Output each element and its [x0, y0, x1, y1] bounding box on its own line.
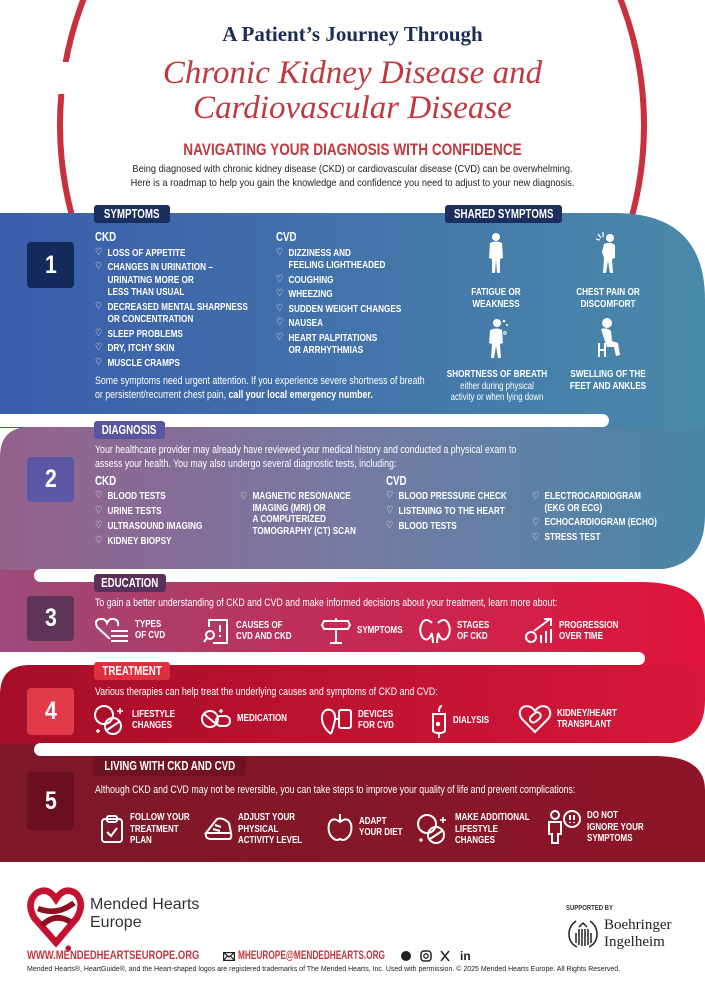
- number 1: [27, 242, 74, 288]
- icon: physical activity: PHYSICAL: [238, 822, 278, 834]
- CVD tests 2: ELECTROCARDIOGRAM: [544, 490, 641, 502]
- logo: mended hearts europe: Europe: [90, 914, 142, 931]
- CKD list: LOSS OF APPETITE: [107, 246, 185, 258]
- icon: medication: MEDICATION: [237, 712, 287, 724]
- label: treatment: [94, 662, 170, 680]
- icon: diet: [328, 814, 402, 841]
- icon: treatment plan: FOLLOW YOUR: [130, 811, 190, 823]
- number 2: 2: [45, 465, 56, 493]
- panel: diagnosis: [27, 421, 657, 546]
- label: shared symptoms: SHARED SYMPTOMS: [454, 207, 553, 221]
- panel: symptoms: [27, 205, 646, 402]
- icon: treatment plan: [101, 811, 190, 846]
- CKD list: [95, 230, 248, 368]
- intro text: [131, 163, 574, 188]
- icon: transplant: KIDNEY/HEART: [557, 706, 617, 718]
- contact line: [27, 949, 471, 963]
- supported by boehringer ingelheim: [566, 905, 672, 950]
- supported by boehringer ingelheim: SUPPORTED BY: [566, 905, 613, 912]
- icon: chest pain: CHEST PAIN OR: [576, 286, 640, 298]
- icon: lifestyle changes: CHANGES: [455, 834, 495, 846]
- label: treatment: TREATMENT: [102, 664, 162, 678]
- subtitle: Chronic Kidney Disease and: [163, 55, 542, 91]
- icon: fatigue: [471, 233, 521, 310]
- icon: symptoms: [320, 618, 403, 644]
- CKD list: OR CONCENTRATION: [107, 313, 193, 325]
- icon: types of cvd: [95, 618, 165, 642]
- icon: stages of ckd: OF CKD: [457, 630, 488, 642]
- icon: do not ignore: DO NOT: [587, 809, 618, 821]
- icon: causes: CAUSES OF: [236, 618, 283, 630]
- CKD list: LESS THAN USUAL: [107, 286, 184, 298]
- icon: swelling: [570, 318, 646, 392]
- icon: transplant: TRANSPLANT: [557, 718, 611, 730]
- icon: dialysis: [432, 705, 489, 738]
- CVD tests: CVD: [386, 474, 407, 488]
- icon: devices: [320, 708, 394, 735]
- CKD imaging: [240, 490, 356, 536]
- number 2: [27, 457, 74, 502]
- CVD tests 2: (EKG OR ECG): [544, 502, 602, 514]
- CVD list: DIZZINESS AND: [288, 246, 351, 258]
- title: A Patient’s Journey Through: [222, 22, 483, 46]
- icon: swelling: FEET AND ANKLES: [570, 380, 646, 392]
- number 3: [27, 596, 74, 641]
- intro text: Being diagnosed with chronic kidney disease (CKD) or cardiovascular disease (CVD) can be overwhelming.: [132, 163, 573, 175]
- icon: progression: OVER TIME: [559, 630, 603, 642]
- icon: do not ignore: [548, 809, 644, 844]
- subtitle: [163, 55, 542, 126]
- CKD list: DRY, ITCHY SKIN: [107, 342, 174, 354]
- contact line: MHEUROPE@MENDEDHEARTS.ORG: [238, 950, 385, 962]
- CVD list: FEELING LIGHTHEADED: [288, 259, 385, 271]
- CKD tests: ULTRASOUND IMAGING: [107, 520, 202, 532]
- icon: stages of ckd: STAGES: [457, 618, 489, 630]
- CKD list: URINATING MORE OR: [107, 274, 194, 286]
- icon: physical activity: ADJUST YOUR: [238, 811, 295, 823]
- number 3: 3: [45, 604, 56, 632]
- icon: lifestyle: LIFESTYLE: [132, 708, 175, 720]
- icon: causes: [203, 618, 292, 644]
- text: To gain a better understanding of CKD and CVD and make informed decisions about your treatment, learn more about:: [95, 597, 557, 609]
- CVD tests 2: ECHOCARDIOGRAM (ECHO): [544, 516, 657, 528]
- panel: living with ckd and cvd: [27, 756, 644, 846]
- number 1: 1: [45, 251, 56, 279]
- icon: lifestyle changes: MAKE ADDITIONAL: [455, 811, 530, 823]
- intro text: Here is a roadmap to help you gain the knowledge and confidence you need to adjust to your new diagnosis.: [131, 176, 574, 188]
- CKD tests: URINE TESTS: [107, 504, 162, 516]
- CKD list: CKD: [95, 230, 116, 244]
- CKD imaging: A COMPUTERIZED: [252, 513, 326, 525]
- icon: progression: PROGRESSION: [559, 618, 618, 630]
- icon: causes: CVD AND CKD: [236, 630, 292, 642]
- subtitle: Cardiovascular Disease: [193, 90, 512, 126]
- tagline: NAVIGATING YOUR DIAGNOSIS WITH CONFIDENCE: [183, 140, 522, 159]
- CVD list: HEART PALPITATIONS: [288, 332, 377, 344]
- CVD list: OR ARRHYTHMIAS: [288, 344, 363, 356]
- CKD tests: [95, 474, 202, 546]
- label: diagnosis: [94, 421, 165, 439]
- CKD list: CHANGES IN URINATION –: [107, 261, 213, 273]
- icon: stages of ckd: [419, 618, 489, 644]
- label: shared symptoms: [445, 205, 562, 223]
- icon: lifestyle changes: LIFESTYLE: [455, 822, 498, 834]
- icon: physical activity: ACTIVITY LEVEL: [238, 834, 302, 846]
- icon: devices: DEVICES: [358, 708, 393, 720]
- CVD list: [276, 230, 401, 356]
- disclaimer: Mended Hearts®, HeartGuide®, and the Heart-shaped logos are registered trademarks of The Mended Hearts, Inc. Used with permission. © 2025 Mended Hearts Europe. All Rights Reserved.: [27, 966, 620, 973]
- icon: shortness of breath: activity or when lying down: [451, 392, 543, 402]
- CKD imaging: IMAGING (MRI) OR: [252, 502, 326, 514]
- CKD list: SLEEP PROBLEMS: [107, 328, 183, 340]
- icon: lifestyle: [94, 705, 175, 735]
- CKD imaging: MAGNETIC RESONANCE: [252, 490, 351, 502]
- icon: dialysis: DIALYSIS: [453, 714, 489, 726]
- icon: shortness of breath: SHORTNESS OF BREATH: [447, 368, 547, 380]
- CVD list: NAUSEA: [288, 317, 323, 329]
- icon: medication: [201, 709, 287, 728]
- icon: treatment plan: TREATMENT: [130, 822, 179, 834]
- CKD list: DECREASED MENTAL SHARPNESS: [107, 300, 248, 312]
- logo: mended hearts europe: [27, 887, 199, 951]
- CKD list: MUSCLE CRAMPS: [107, 356, 180, 368]
- CVD tests: BLOOD TESTS: [398, 520, 457, 532]
- icon: physical activity: [204, 811, 302, 846]
- intro paragraph: Your healthcare provider may already have reviewed your medical history and conducted a physical exam to assess your health. You may also undergo several diagnostic tests, including:: [95, 444, 516, 470]
- number 4: [27, 688, 74, 735]
- icon: types of cvd: TYPES: [135, 618, 161, 630]
- icon: chest pain: DISCOMFORT: [580, 298, 636, 310]
- label: education: EDUCATION: [101, 576, 159, 590]
- supported by boehringer ingelheim: Ingelheim: [604, 934, 665, 950]
- CVD tests: [386, 474, 507, 532]
- CVD list: WHEEZING: [288, 288, 333, 300]
- number 5: 5: [45, 787, 56, 815]
- CVD tests 2: [532, 490, 657, 542]
- icon: diet: YOUR DIET: [359, 826, 402, 838]
- icon: types of cvd: OF CVD: [135, 629, 165, 641]
- label: symptoms: [94, 205, 170, 223]
- icon: devices: FOR CVD: [358, 719, 394, 731]
- panel: education: [27, 574, 618, 644]
- CVD list: SUDDEN WEIGHT CHANGES: [288, 302, 401, 314]
- contact line: in: [460, 949, 471, 963]
- icon: shortness of breath: either during physical: [460, 380, 534, 392]
- CKD imaging: TOMOGRAPHY (CT) SCAN: [252, 524, 356, 536]
- icon: lifestyle changes: [417, 811, 530, 846]
- text: Various therapies can help treat the underlying causes and symptoms of CKD and CVD:: [95, 686, 438, 698]
- icon: lifestyle: CHANGES: [132, 719, 172, 731]
- icon: progression: [525, 618, 618, 643]
- CVD list: CVD: [276, 230, 297, 244]
- icon: do not ignore: SYMPTOMS: [587, 832, 633, 844]
- CKD tests: BLOOD TESTS: [107, 490, 166, 502]
- icon: fatigue: FATIGUE OR: [471, 286, 521, 298]
- label: living: [94, 756, 246, 776]
- icon: swelling: SWELLING OF THE: [570, 368, 646, 380]
- label: living: LIVING WITH CKD AND CVD: [105, 759, 235, 773]
- number 5: [27, 772, 74, 830]
- urgent note: Some symptoms need urgent attention. If you experience severe shortness of breath or persistent/recurrent chest pain, call your local emergency number.: [95, 375, 425, 400]
- label: symptoms: SYMPTOMS: [104, 207, 160, 221]
- icon: transplant: [518, 705, 617, 734]
- supported by boehringer ingelheim: Boehringer: [604, 917, 671, 933]
- CVD tests: LISTENING TO THE HEART: [398, 504, 505, 516]
- contact line: WWW.MENDEDHEARTSEUROPE.ORG: [27, 950, 199, 962]
- CKD tests: KIDNEY BIOPSY: [107, 534, 172, 546]
- CKD tests: CKD: [95, 474, 116, 488]
- icon: fatigue: WEAKNESS: [472, 298, 520, 310]
- icon: treatment plan: PLAN: [130, 834, 152, 846]
- icon: symptoms: SYMPTOMS: [357, 624, 403, 636]
- icon: chest pain: [576, 232, 640, 310]
- label: education: [94, 574, 166, 592]
- number 4: 4: [45, 697, 56, 725]
- logo: mended hearts europe: Mended Hearts: [90, 896, 199, 913]
- icon: do not ignore: IGNORE YOUR: [587, 820, 644, 832]
- label: diagnosis: DIAGNOSIS: [102, 423, 157, 437]
- CVD tests: BLOOD PRESSURE CHECK: [398, 490, 507, 502]
- CVD list: COUGHING: [288, 274, 334, 286]
- CVD tests 2: STRESS TEST: [544, 530, 600, 542]
- icon: shortness of breath: [447, 319, 547, 402]
- icon: diet: ADAPT: [359, 814, 386, 826]
- text: Although CKD and CVD may not be reversible, you can take steps to improve your quality of life and prevent complications:: [95, 784, 575, 796]
- panel: treatment: [27, 662, 617, 738]
